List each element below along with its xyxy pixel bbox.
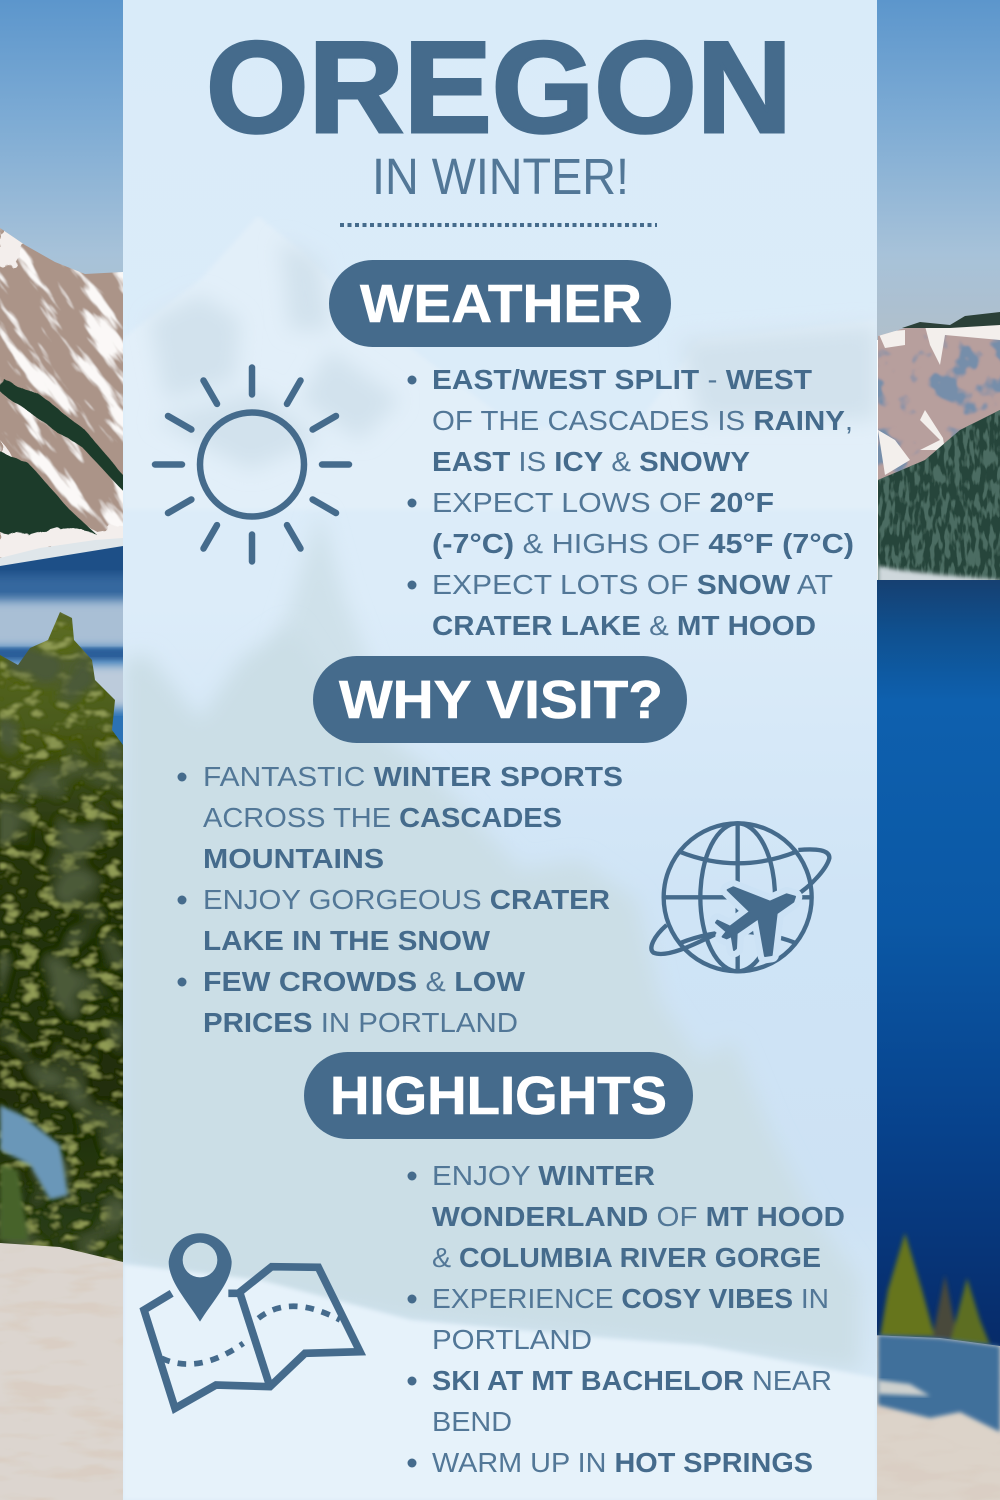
left snow patch behind tree	[0, 1090, 80, 1250]
heading: highlights	[304, 1052, 693, 1139]
text block: highlights bullets: & COLUMBIA RIVER GORGE	[432, 1242, 821, 1273]
text block: why visit bullets: FANTASTIC WINTER SPORTS	[203, 761, 623, 792]
right trees	[880, 1233, 990, 1345]
text block: weather bullets	[408, 364, 854, 641]
text block: highlights bullets: WONDERLAND OF MT HOOD	[432, 1201, 845, 1232]
text block: why visit bullets: FEW CROWDS & LOW	[203, 966, 526, 997]
right mountains	[878, 325, 1000, 480]
translucent panel	[123, 0, 877, 1500]
text block: weather bullets: (-7°C) & HIGHS OF 45°F (7°C)	[432, 528, 854, 559]
heading: why visit	[313, 656, 687, 743]
text block: why visit bullets: LAKE IN THE SNOW	[203, 925, 491, 956]
text block: highlights bullets: WARM UP IN HOT SPRINGS	[432, 1447, 813, 1478]
right ground shadow	[878, 1335, 1000, 1432]
text block: weather bullets: EAST IS ICY & SNOWY	[432, 446, 750, 477]
text block: highlights bullets: BEND	[432, 1406, 512, 1437]
ghost photo in panel	[123, 216, 877, 1500]
text block: why visit bullets	[178, 761, 623, 1038]
heading: why visit: WHY VISIT?	[339, 670, 663, 730]
text block: weather bullets: EXPECT LOTS OF SNOW AT	[432, 569, 833, 600]
text block: weather bullets: OF THE CASCADES IS RAINY,	[432, 405, 853, 436]
title: OREGON	[206, 14, 792, 160]
heading: highlights: HIGHLIGHTS	[330, 1066, 667, 1126]
text block: weather bullets: CRATER LAKE & MT HOOD	[432, 610, 816, 641]
left tree	[0, 600, 123, 1270]
text block: highlights bullets: SKI AT MT BACHELOR NEAR	[432, 1365, 832, 1396]
heading: weather: WEATHER	[360, 274, 642, 334]
icon: globe with plane	[651, 823, 829, 972]
left mountain	[0, 228, 123, 558]
text block: highlights bullets: ENJOY WINTER	[432, 1160, 655, 1191]
right lake	[870, 580, 1000, 1350]
right ridge trees	[902, 312, 1000, 328]
right forest	[878, 410, 1000, 590]
text block: highlights bullets: PORTLAND	[432, 1324, 592, 1355]
left lake	[0, 535, 150, 1265]
subtitle: IN WINTER!	[372, 148, 629, 205]
text block: highlights bullets: EXPERIENCE COSY VIBES IN	[432, 1283, 829, 1314]
heading: weather	[329, 260, 671, 347]
dotted divider	[340, 223, 657, 227]
text block: why visit bullets: ENJOY GORGEOUS CRATER	[203, 884, 610, 915]
icon: sun	[155, 368, 349, 562]
text block: highlights bullets	[408, 1160, 845, 1478]
text block: weather bullets: EAST/WEST SPLIT - WEST	[432, 364, 812, 395]
text block: weather bullets: EXPECT LOWS OF 20°F	[432, 487, 774, 518]
text block: why visit bullets: PRICES IN PORTLAND	[203, 1007, 518, 1038]
text block: why visit bullets: MOUNTAINS	[203, 843, 384, 874]
left ground	[0, 1243, 123, 1500]
right shoreline snow	[878, 566, 1000, 590]
icon: map with pin	[144, 1233, 360, 1408]
right ground	[870, 1335, 1000, 1500]
text block: why visit bullets: ACROSS THE CASCADES	[203, 802, 562, 833]
